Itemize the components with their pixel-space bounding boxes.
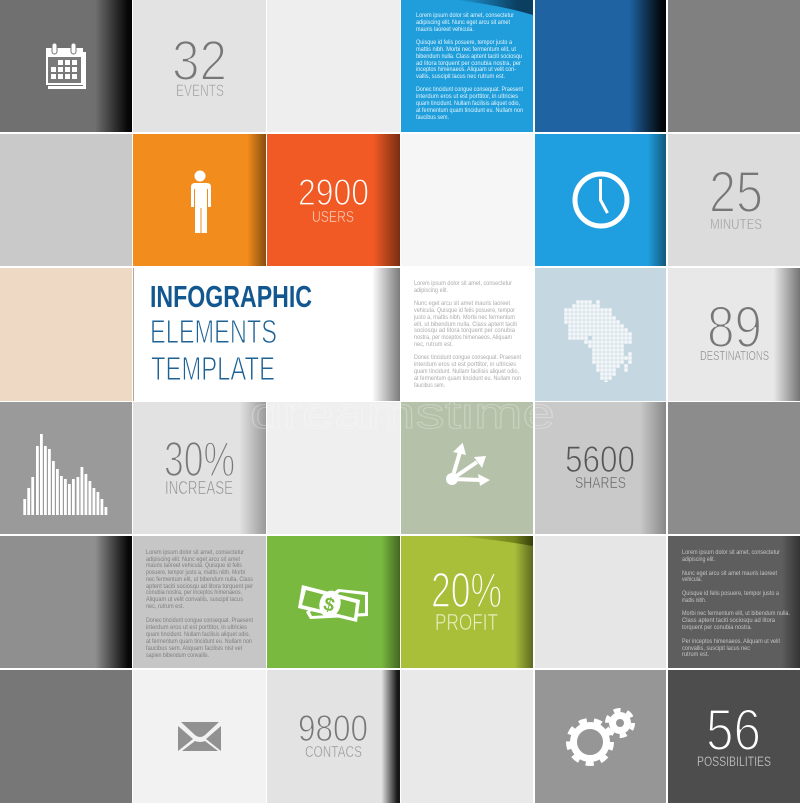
- text block: white lorem: nostra, per inceptos himenaeos. Aliquam: [414, 335, 512, 341]
- text block: gray lorem: mauris laoreet vehicula. Quisque id felis: [146, 563, 242, 569]
- text block: dark lorem: vehicula.: [682, 577, 702, 583]
- text block: white lorem: Nunc eget arcu sit amet mauris laoreet: [414, 301, 510, 307]
- text block: dark lorem: Quisque id felis posuere, tempor justo a: [682, 591, 780, 597]
- text block: white lorem: Donec tincidunt congue consequat. Praesent: [414, 355, 521, 361]
- panel: calendar tile: [0, 0, 132, 132]
- text block: dark lorem: Class aptent taciti sociosqu ad litora: [682, 618, 776, 624]
- text block: blue lorem: inceptos himenaeos. Aliquam ut velit con-: [416, 67, 516, 73]
- text block: white lorem: vehicula. Quisque id felis posuere, tempor: [414, 308, 515, 314]
- text block: blue lorem: at fermentum quam tincidunt eu. Nullam non: [416, 108, 523, 114]
- label: events: EVENTS: [176, 81, 224, 100]
- text block: dark lorem: Lorem ipsum dolor sit amet, consectetur: [682, 550, 780, 556]
- panel: gray tile bottom left: [0, 670, 132, 803]
- text block: blue lorem: [416, 13, 523, 121]
- text block: blue lorem: quam tincidunt. Nullam facilisis aliquet odio,: [416, 101, 520, 107]
- panel: blue text tile: [401, 0, 533, 132]
- text block: dark lorem: Nunc eget arcu sit amet mauris laoreet: [682, 571, 777, 577]
- subtitle: elements: ELEMENTS: [150, 313, 277, 350]
- panel: gears tile: [535, 670, 666, 803]
- icon: banknotes: $: [321, 594, 337, 617]
- text block: gray lorem: quam tincidunt. Nullam facilisis aliquet odio,: [146, 632, 250, 638]
- text block: white lorem: Lorem ipsum dolor sit amet, consectetur: [414, 281, 512, 287]
- text block: white lorem: adipiscing elit.: [414, 288, 448, 294]
- text block: gray lorem: nec fermentum elit, ut bibendum nulla. Class: [146, 577, 253, 583]
- text block: white lorem: interdum eros ut est porttitor, in ultricies: [414, 362, 516, 368]
- text block: gray lorem: nec, rutrum est.: [146, 604, 184, 610]
- number: 56: 56: [706, 698, 761, 763]
- number: 32: 32: [172, 29, 227, 93]
- panel: blank tile row 4: [267, 402, 400, 534]
- panel: users stat: [267, 134, 400, 266]
- panel: destinations stat: [668, 268, 800, 401]
- panel: title tile: [133, 268, 400, 401]
- number: 9800: 9800: [298, 708, 368, 749]
- number: 2900: 2900: [298, 172, 369, 213]
- watermark: dreamstime: [250, 389, 555, 438]
- text block: blue lorem: mattis nibh. Morbi nec fermentum elit, ut: [416, 47, 516, 53]
- text block: blue lorem: Lorem ipsum dolor sit amet, consectetur: [416, 13, 514, 19]
- label: possibilities: POSSIBILITIES: [697, 753, 771, 769]
- label: users: USERS: [312, 209, 354, 226]
- panel: blank tile bottom: [401, 670, 533, 803]
- text block: blue lorem: Quisque id felis posuere, tempor justo a: [416, 40, 513, 46]
- text block: blue lorem: faucibus sem.: [416, 115, 449, 121]
- text block: blue lorem: ad litora torquent per conubia nostra, per: [416, 61, 521, 67]
- label: minutes: MINUTES: [710, 216, 762, 233]
- text block: dark lorem: torquent per conubia nostra.: [682, 625, 752, 631]
- number: 25: 25: [709, 160, 763, 225]
- panel: beige tile: [0, 268, 132, 401]
- panel: gray tile row 4 right: [668, 402, 800, 534]
- panel: shares stat: [535, 402, 666, 534]
- panel: envelope tile: [133, 670, 266, 803]
- text block: white lorem: quam tincidunt. Nullam facilisis aliquet odio,: [414, 369, 519, 375]
- panel: gray tile row 5 left: [0, 536, 132, 668]
- panel: white tile row 2: [401, 134, 533, 266]
- panel: gray tile top right: [668, 0, 800, 132]
- panel: dark text tile: [668, 536, 800, 668]
- panel: dark blue tile: [535, 0, 666, 132]
- text block: white lorem: at fermentum quam tincidunt eu. Nullam non: [414, 376, 521, 382]
- text block: gray lorem: conubia nostra, per inceptos himenaeos.: [146, 590, 242, 596]
- text block: white lorem: justo a, mattis nibh. Morbi nec fermentum: [413, 315, 515, 321]
- panel: white text tile: [401, 268, 533, 401]
- number: 20 percent: 20%: [431, 564, 502, 618]
- text block: gray lorem: aptent taciti sociosqu ad litora torquent per: [146, 584, 253, 590]
- icon: person: [191, 170, 211, 233]
- text block: blue lorem: vallis, suscipit lacus nec rutrum est.: [416, 74, 505, 80]
- label: contacs: CONTACS: [305, 744, 362, 761]
- panel: gray text tile: [133, 536, 266, 668]
- panel: arrows tile: [401, 402, 533, 534]
- subtitle: template: TEMPLATE: [151, 350, 275, 387]
- panel: gray tile row 2: [0, 134, 132, 266]
- text block: gray lorem: Aliquam ut velit convallis, suscipit lacus: [146, 597, 243, 603]
- text block: white lorem: nec, rutrum est.: [414, 342, 453, 348]
- label: profit: PROFIT: [435, 609, 498, 635]
- icon: calendar: [46, 43, 86, 89]
- panel: orange person tile: [133, 134, 266, 266]
- panel: blank light tile: [267, 0, 400, 132]
- text block: gray lorem: interdum eros ut est porttitor, in ultricies: [146, 625, 247, 631]
- icon: gears: [568, 710, 633, 764]
- text block: dark lorem: rutrum est.: [682, 652, 709, 658]
- text block: blue lorem: interdum eros ut est porttitor, in ultricies: [416, 94, 518, 100]
- panel: blank tile row 5: [535, 536, 666, 668]
- panel: contacts stat: [267, 670, 400, 803]
- text block: blue lorem: bibendum nulla. Class aptent taciti sociosqu: [416, 54, 522, 60]
- panel: increase stat: [133, 402, 266, 534]
- text block: gray lorem: Donec tincidunt congue consequat. Praesent: [146, 618, 253, 624]
- text block: blue lorem: adipiscing elit. Nunc eget arcu sit amet: [416, 20, 510, 26]
- text block: gray lorem: sapien bibendum convallis.: [146, 653, 209, 659]
- label: increase: INCREASE: [165, 478, 233, 498]
- text block: blue lorem: mauris laoreet vehicula.: [416, 27, 474, 33]
- text block: dark lorem: adipiscing elit.: [682, 557, 715, 563]
- panel: events stat: [133, 0, 266, 132]
- text block: dark lorem: Per inceptos himenaeos. Aliquam ut velit: [682, 639, 780, 645]
- text block: white lorem: faucibus sem.: [414, 383, 445, 389]
- panel: africa map tile: [535, 268, 666, 401]
- icon: clock: [575, 174, 627, 226]
- title: infographic: INFOGRAPHIC: [150, 279, 312, 314]
- text block: gray lorem: Lorem ipsum dolor sit amet, consectetur: [146, 550, 244, 556]
- text block: white lorem: sociosqu ad litora torquent per conubia: [414, 328, 516, 334]
- chart: histogram bars: [23, 434, 107, 515]
- number: 5600: 5600: [565, 439, 635, 480]
- panel: clock tile: [535, 134, 666, 266]
- icon: dotted africa map: [564, 300, 632, 382]
- panel: minutes stat: [668, 134, 800, 266]
- label: shares: SHARES: [575, 475, 626, 492]
- text block: dark lorem: Morbi nec fermentum elit, ut bibendum nulla.: [682, 611, 790, 617]
- text block: white lorem: elit, ut bibendum nulla. Class aptent taciti: [414, 322, 517, 328]
- panel: money tile: [267, 536, 400, 668]
- number: 30 percent: 30%: [164, 433, 235, 487]
- number: 89: 89: [707, 295, 762, 360]
- text block: dark lorem: mattis nibh.: [682, 598, 706, 604]
- icon: envelope: [178, 722, 221, 751]
- panel: histogram tile: [0, 402, 132, 534]
- text block: dark lorem: convallis, suscipit lacus nec: [682, 646, 750, 652]
- label: destinations: DESTINATIONS: [700, 348, 769, 363]
- text block: blue lorem: Donec tincidunt congue consequat. Praesent: [416, 87, 523, 93]
- panel: profit stat: [401, 536, 533, 668]
- text block: gray lorem: [146, 550, 253, 659]
- text block: dark lorem: [682, 550, 790, 658]
- text block: gray lorem: faucibus sem. Aliquam facilisis nisl vel: [146, 646, 242, 652]
- text block: gray lorem: at fermentum quam tincidunt eu. Nullam non: [146, 639, 252, 645]
- text block: white lorem: [413, 281, 521, 389]
- text block: gray lorem: posuere, tempor justo a, mattis nibh. Morbi: [146, 570, 245, 576]
- panel: possibilities stat: [668, 670, 800, 803]
- text block: gray lorem: adipiscing elit. Nunc eget arcu sit amet: [146, 557, 240, 563]
- icon: branching arrows: [446, 443, 490, 486]
